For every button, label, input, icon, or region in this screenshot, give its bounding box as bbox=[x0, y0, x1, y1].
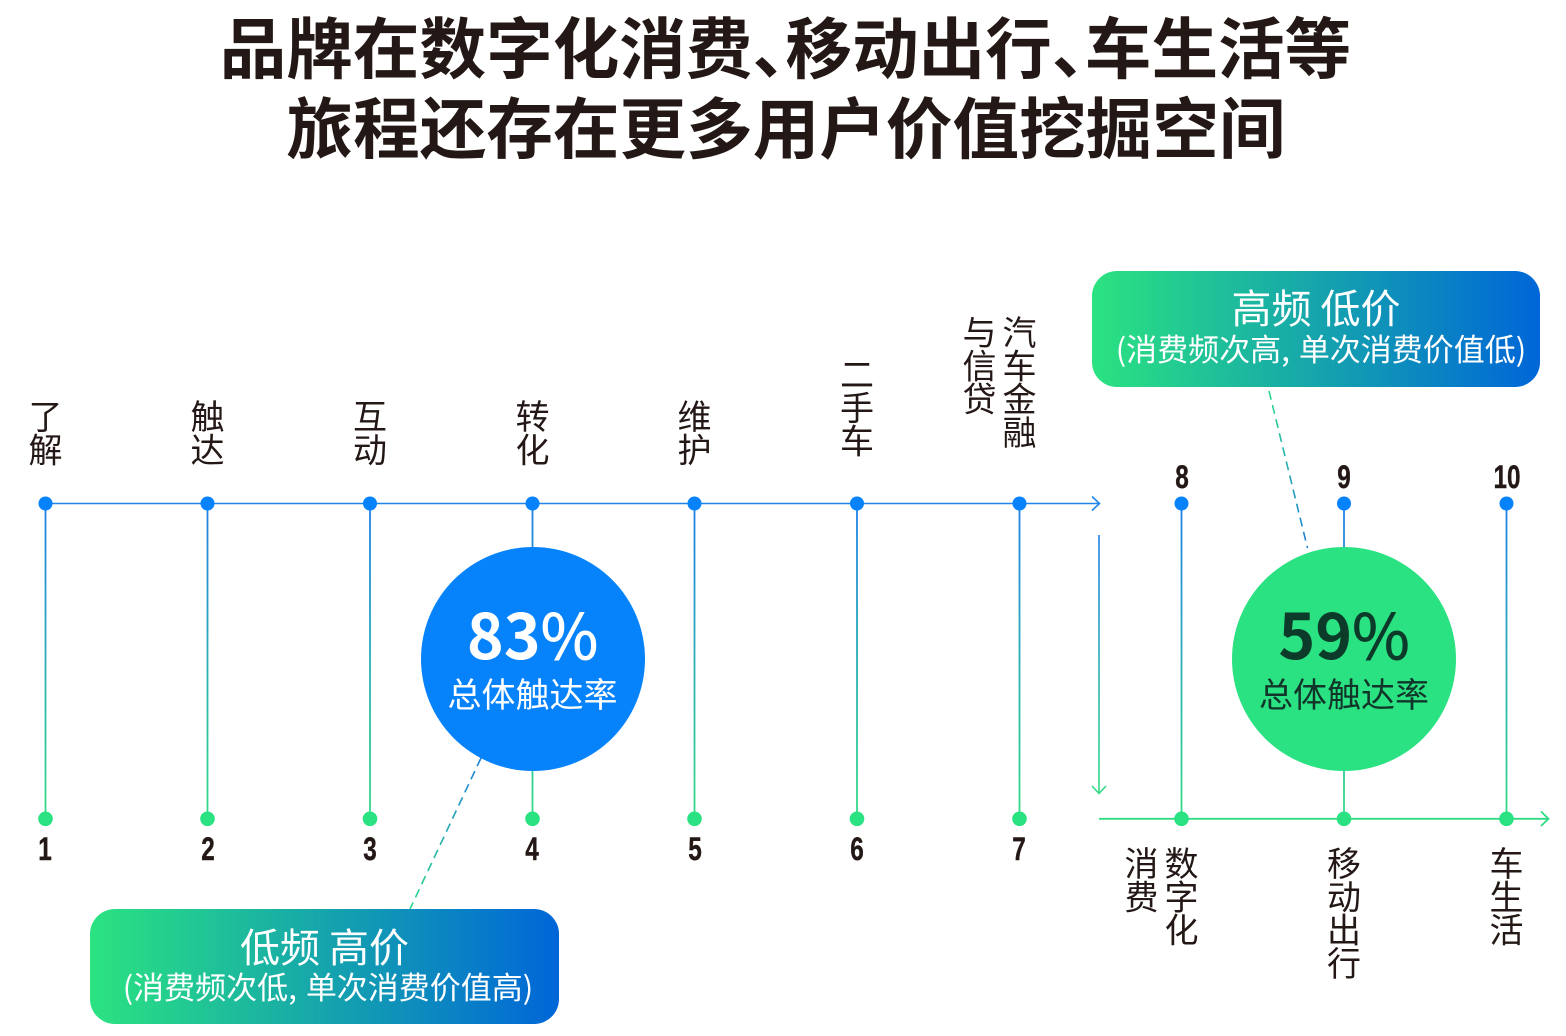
stage label: 二手车: 二手车 bbox=[832, 357, 882, 457]
vertical stems bbox=[46, 503, 1506, 819]
title bbox=[220, 0, 1351, 173]
stage label: 互动: 互动 bbox=[346, 399, 394, 466]
number 2: 2 bbox=[201, 831, 214, 867]
number 1: 1 bbox=[38, 831, 52, 867]
dashed connector: high frequency bbox=[1269, 391, 1308, 548]
callout heading: 高频 低价 bbox=[1232, 277, 1400, 335]
number 3: 3 bbox=[363, 831, 377, 867]
number 9: 9 bbox=[1337, 459, 1351, 495]
bottom axis arrow bbox=[1099, 812, 1548, 826]
stage label: 触达: 触达 bbox=[183, 399, 232, 466]
dashed connector: low frequency bbox=[410, 758, 481, 909]
top axis arrow bbox=[52, 496, 1100, 510]
percentage 59%: 59% bbox=[1278, 586, 1410, 676]
number 5: 5 bbox=[688, 831, 701, 867]
percentage 83%: 83% bbox=[467, 586, 598, 676]
number 4: 4 bbox=[525, 831, 539, 867]
callout detail: (消费频次高, 单次消费价值低) bbox=[1116, 325, 1526, 370]
scenario label: 车生活: 车生活 bbox=[1482, 846, 1531, 946]
number 7: 7 bbox=[1012, 831, 1026, 867]
number 6: 6 bbox=[850, 831, 864, 867]
number 8: 8 bbox=[1175, 459, 1188, 495]
stage label: 转化: 转化 bbox=[508, 399, 557, 466]
stage label: 维护: 维护 bbox=[670, 399, 719, 466]
stage label: 汽车金融: 汽车金融 bbox=[995, 315, 1044, 449]
down arrow bbox=[1092, 535, 1106, 794]
green dots bbox=[38, 812, 1514, 826]
callout: high frequency low price bbox=[1092, 271, 1540, 387]
number 10: 10 bbox=[1493, 459, 1520, 495]
title: 旅程还存在更多用户价值挖掘空间 bbox=[287, 77, 1285, 173]
caption: 总体触达率 bbox=[1259, 668, 1429, 716]
callout detail: (消费频次低, 单次消费价值高) bbox=[123, 963, 533, 1008]
scenario label: 数字化: 数字化 bbox=[1157, 846, 1206, 946]
scenario label: 移动出行: 移动出行 bbox=[1320, 846, 1368, 980]
stage label: 与信贷: 与信贷 bbox=[955, 315, 1004, 415]
caption: 总体触达率 bbox=[448, 668, 618, 716]
circle: 59% reach bbox=[1232, 546, 1456, 770]
scenario label: 消费: 消费 bbox=[1117, 846, 1166, 913]
circle: 83% reach bbox=[420, 546, 644, 770]
callout: low frequency high price bbox=[90, 909, 559, 1024]
stage label: 了解: 了解 bbox=[21, 399, 70, 466]
callout heading: 低频 高价 bbox=[240, 916, 409, 974]
blue dots bbox=[38, 496, 1514, 510]
